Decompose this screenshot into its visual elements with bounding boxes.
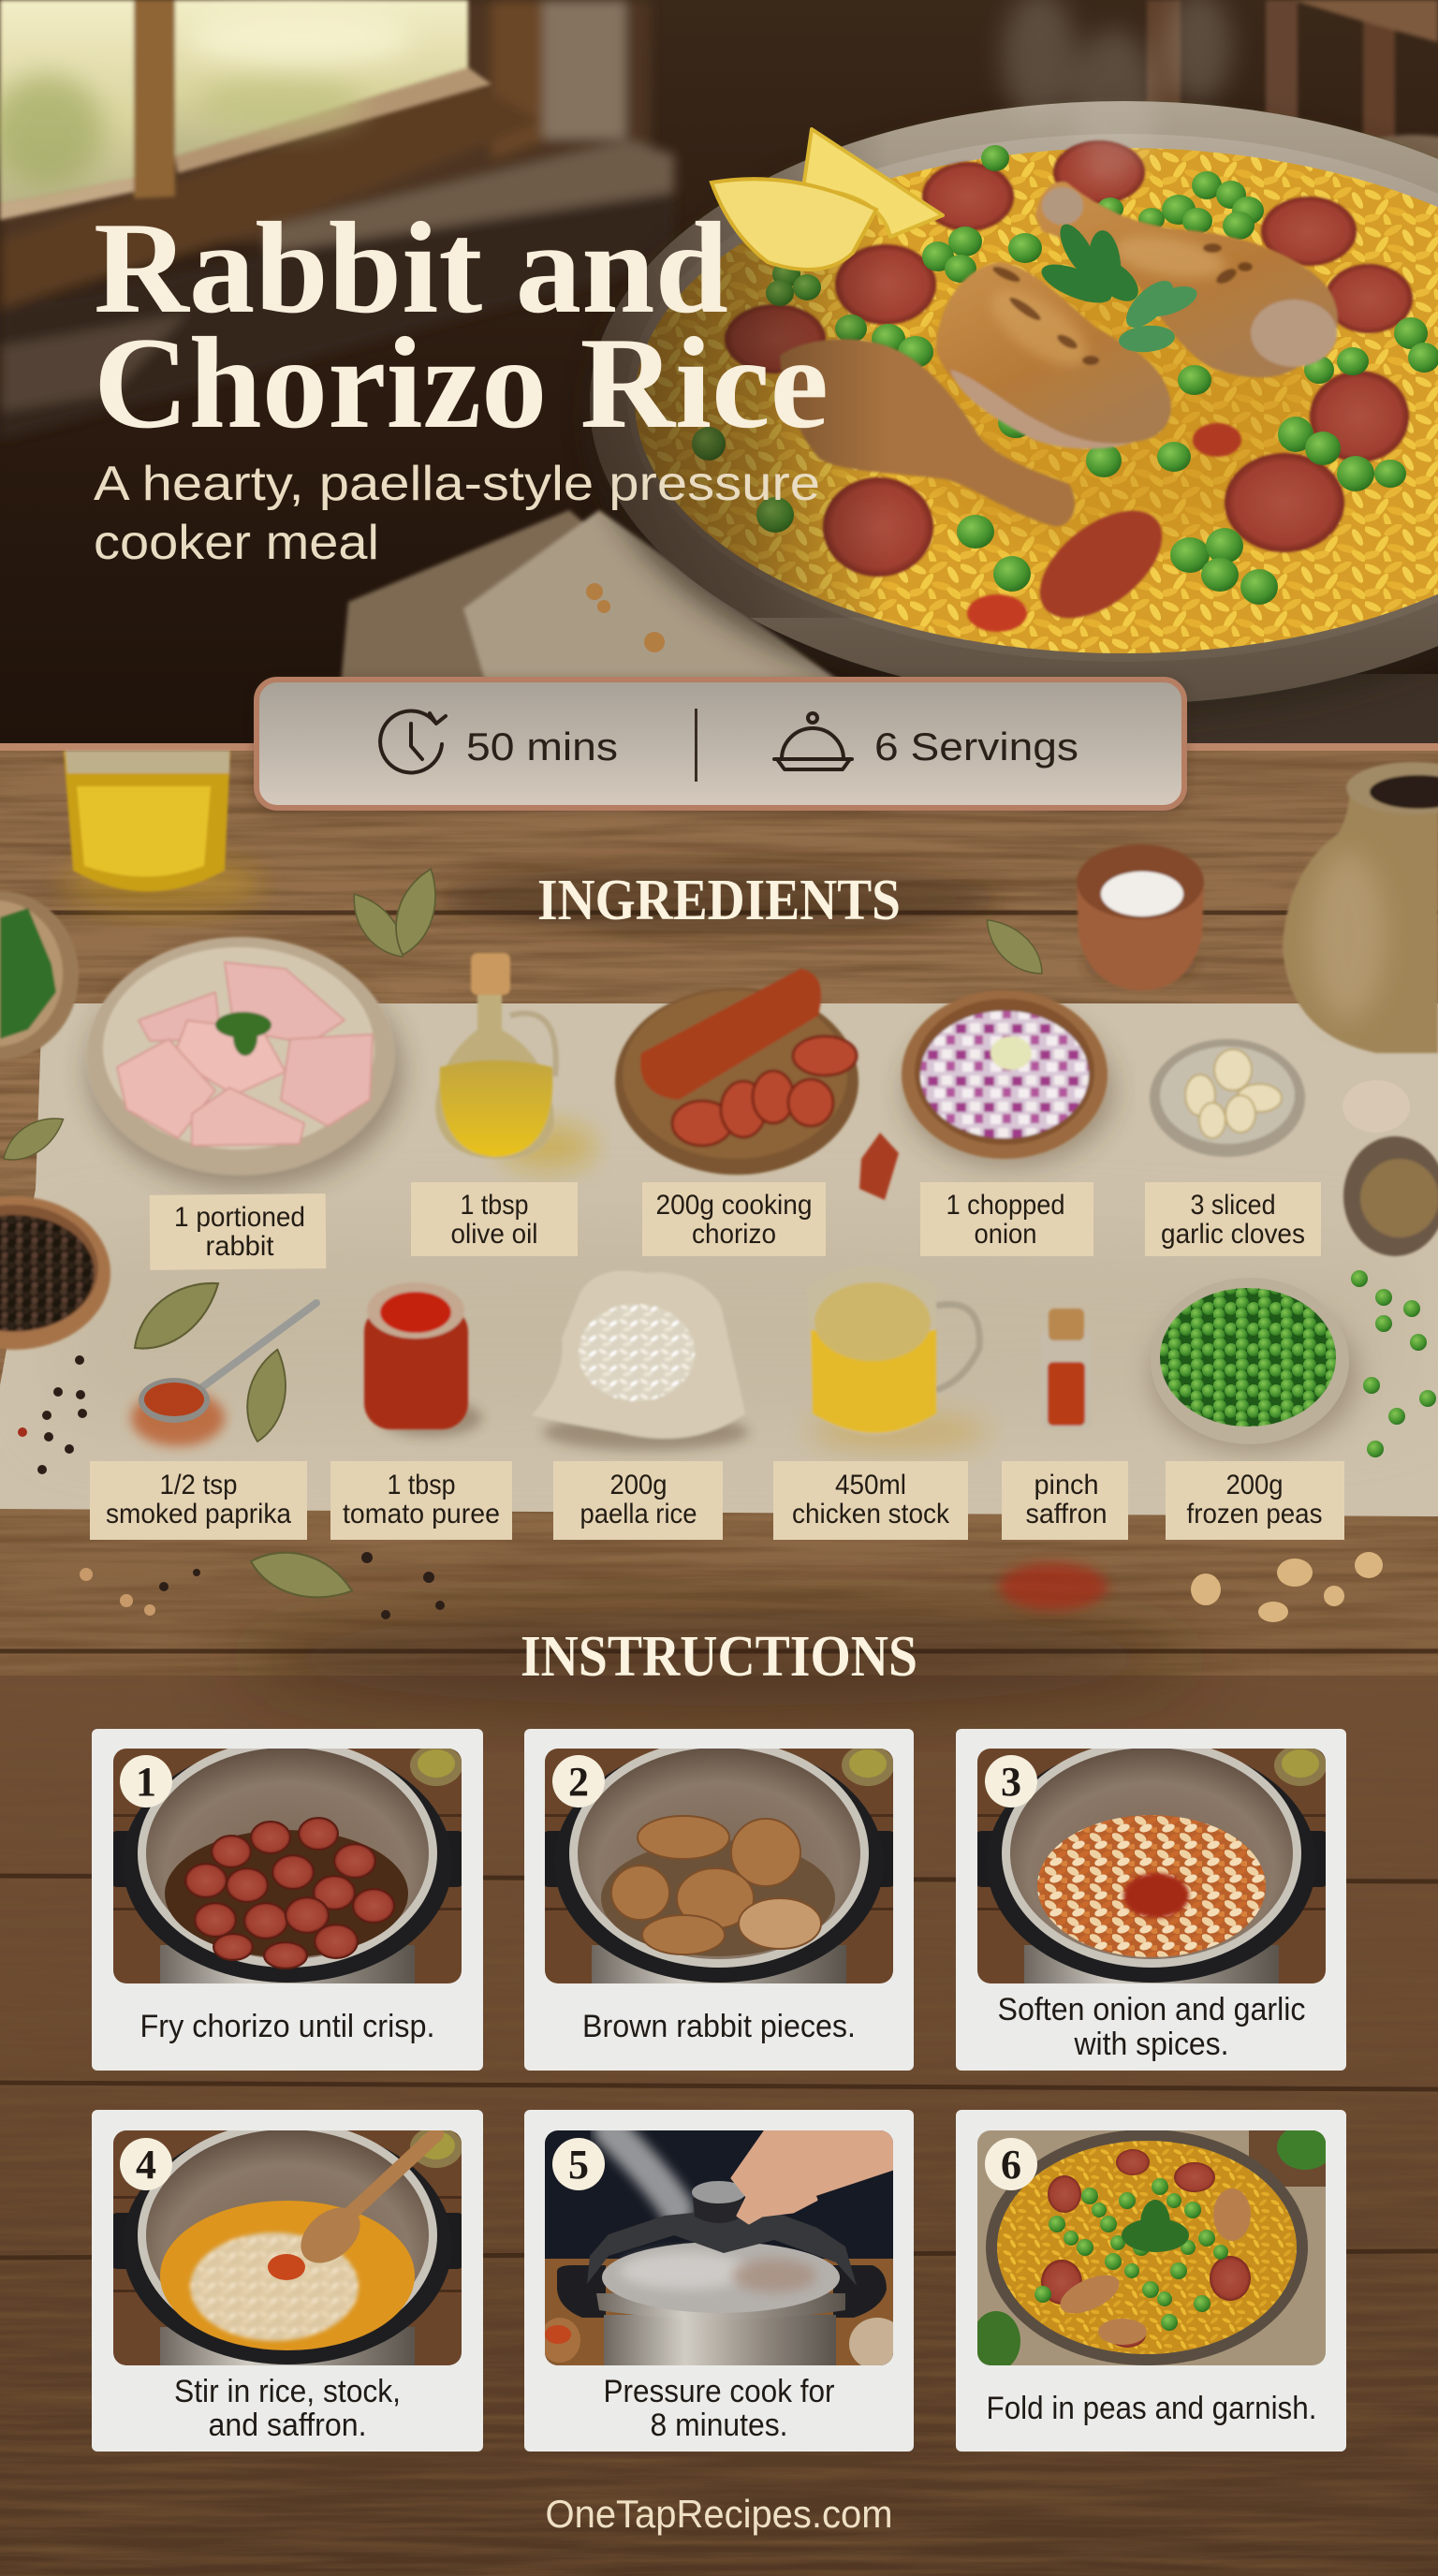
label: chorizo [642,1182,826,1256]
smoked paprika spoon [121,1270,316,1446]
peas bowl [1151,1278,1357,1453]
step 4 caption: and saffron. [208,2408,367,2443]
label: chicken stock [773,1461,968,1540]
label: chorizo: chorizo [692,1219,776,1250]
chorizo board [615,969,899,1200]
window wall and sill [0,0,674,440]
step 2 caption: Brown rabbit pieces. [582,2009,856,2044]
step 2 card [524,1729,914,2071]
table scatter: crumbs [1191,1552,1383,1622]
step 2 number [552,1755,605,1808]
subtitle: cooker meal [94,516,379,570]
window panes [0,0,492,220]
step 3 caption [998,1992,1305,2062]
ingredients linen cloth [0,1003,1438,1516]
label: frozen peas: 200g [1226,1470,1283,1500]
saffron vial [1041,1309,1092,1430]
step 3 caption: with spices. [1074,2027,1228,2062]
step 1 caption: Fry chorizo until crisp. [140,2009,434,2044]
step 2 photo [543,1739,895,1983]
wood background: ingredients [0,744,1438,1690]
step 1 number [120,1755,172,1808]
step 5 card [524,2110,914,2452]
title [94,196,829,456]
step 4 number: 4 [136,2142,156,2188]
step 4 caption [174,2374,401,2443]
label: chicken stock: 450ml [835,1470,906,1500]
table scatter: bay leaf and spices [80,1537,445,1619]
step 3 caption: Soften onion and garlic [998,1992,1305,2027]
step 1 card [92,1729,483,2071]
chicken stock jug [807,1266,988,1453]
text: cooking time: 50 mins [466,724,618,768]
salt pot [1077,844,1204,990]
label: rabbit: 1 portioned [174,1202,305,1233]
icon: cloche [774,713,852,769]
label: chicken stock: chicken stock [792,1499,950,1530]
label: frozen peas [1166,1461,1344,1540]
step 4 number [120,2138,172,2190]
scattered peppercorns left [18,1355,87,1474]
step 6 card [956,2110,1346,2452]
label: garlic: garlic cloves [1161,1219,1305,1250]
step 5 caption: 8 minutes. [650,2408,788,2443]
heading: ingredients: INGREDIENTS [537,869,901,932]
label: garlic: 3 sliced [1191,1190,1275,1221]
step 3 photo [976,1739,1328,1983]
chorizo slices [725,140,1413,639]
oil glass, top left [64,751,262,913]
large paella bowl [588,101,1438,721]
label: saffron: pinch [1034,1470,1099,1500]
text: servings: 6 Servings [874,724,1078,768]
step 2 number: 2 [568,1759,589,1805]
label: rabbit [150,1193,326,1270]
step 6 number [985,2138,1037,2190]
label: chorizo: 200g cooking [655,1190,813,1221]
cumin bowl, right [1343,1136,1438,1256]
step 6 caption: Fold in peas and garnish. [987,2391,1316,2426]
stoneware pitcher [1283,762,1438,1053]
label: frozen peas: frozen peas [1187,1499,1322,1530]
label: tomato puree: tomato puree [343,1499,500,1530]
linen napkin [463,510,843,749]
lemon wedges [712,129,943,270]
wood background: instructions [0,1676,1438,2576]
heading: instructions: INSTRUCTIONS [521,1625,917,1689]
step 5 number: 5 [568,2142,589,2188]
step 3 number [985,1755,1037,1808]
peas [692,145,1438,605]
subtitle: A hearty, paella-style pressure [94,457,820,511]
label: olive oil: olive oil [451,1219,537,1250]
label: tomato puree [330,1461,512,1540]
step 5 caption [603,2374,835,2443]
bowl darkening towards title [590,139,876,618]
step 1 number: 1 [136,1759,156,1805]
chair slats [1147,0,1438,183]
bay leaf, left edge [0,1109,71,1168]
step 6 number: 6 [1001,2142,1021,2188]
peppercorn bowl [0,1196,110,1350]
step 5 photo [539,2130,905,2370]
parsley garnish [1036,219,1201,355]
label: onion [920,1182,1093,1256]
label: saffron: saffron [1026,1499,1107,1530]
label: paprika: smoked paprika [106,1499,291,1530]
label: paprika: 1/2 tsp [159,1470,238,1500]
time and servings pill [255,680,1186,811]
label: paella rice: 200g [610,1470,667,1500]
title: Chorizo Rice [94,311,829,456]
label: rabbit: rabbit [206,1231,274,1262]
subtitle [94,457,820,570]
step 4 photo [111,2121,463,2365]
chicken pieces [780,182,1338,526]
icon: clock [380,710,446,772]
label: onion: 1 chopped [946,1190,1065,1221]
footer website: OneTapRecipes.com [545,2492,893,2536]
label: paella rice: paella rice [580,1499,697,1530]
olive oil bottle [435,953,594,1169]
tomato puree jar [364,1282,482,1437]
label: olive oil: 1 tbsp [461,1190,528,1221]
parsley bowl, left [0,891,79,1060]
paella rice sack [532,1271,749,1451]
title: Rabbit and [94,196,728,341]
step 4 card [92,2110,483,2452]
chopped onion bowl [902,990,1114,1167]
label: saffron [1002,1461,1128,1540]
copper divider band [0,743,1438,751]
label: paprika [90,1461,307,1540]
label: olive oil [411,1182,578,1256]
label: paella rice [553,1461,723,1540]
label: garlic [1145,1182,1321,1256]
crumbs on napkin [586,583,665,652]
step 6 photo [972,2125,1333,2371]
step 3 number: 3 [1001,1759,1021,1805]
bay leaves, top [345,863,1050,986]
step 1 photo [111,1739,463,1983]
garlic plate [1150,1039,1305,1157]
step 5 caption: Pressure cook for [603,2374,835,2409]
steam [1002,0,1232,178]
label: tomato puree: 1 tbsp [388,1470,455,1500]
garlic clove, right [1343,1080,1410,1133]
table scatter: saffron threads [999,1562,1108,1611]
loose peas, right [1351,1270,1436,1457]
label: onion: onion [974,1219,1037,1250]
ingredient labels [90,1182,1344,1540]
step 5 number [552,2138,605,2190]
step 3 card [956,1729,1346,2071]
step 4 caption: Stir in rice, stock, [174,2374,401,2409]
wooden board under bowl [335,510,843,749]
rabbit bowl [87,937,403,1189]
